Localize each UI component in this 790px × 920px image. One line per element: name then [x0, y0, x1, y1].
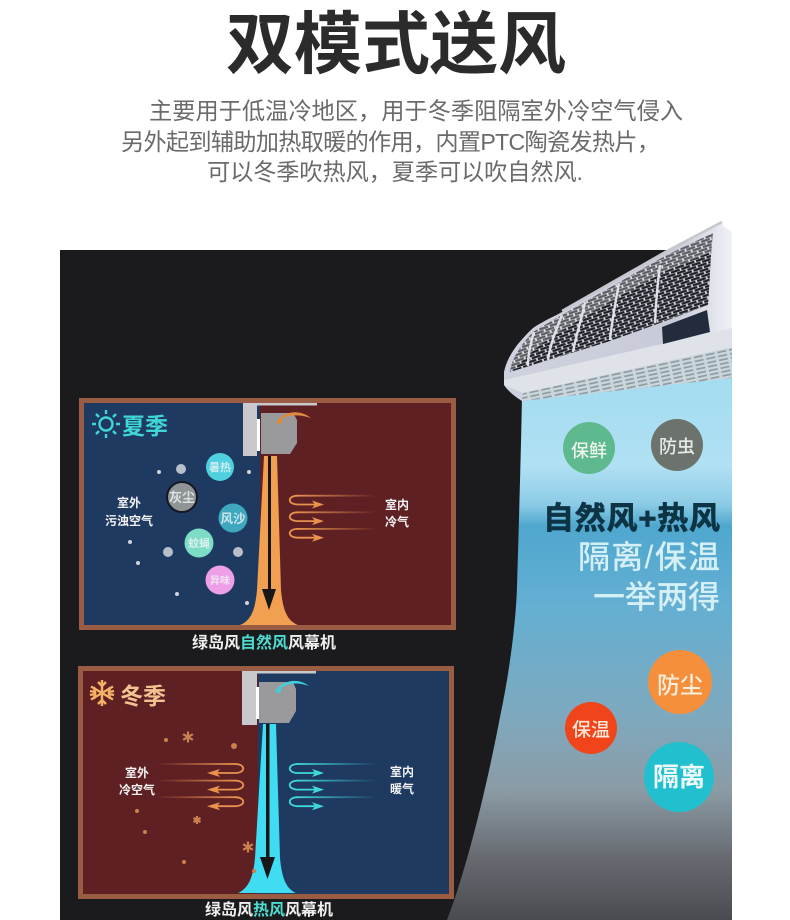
caption: summer: 绿岛风自然风风幕机 [192, 633, 336, 652]
badge: insulation: 保温 [572, 719, 610, 741]
indoor label: 暖气 [390, 781, 414, 796]
intro paragraph: 可以冬季吹热风，夏季可以吹自然风. [207, 159, 583, 185]
intro paragraph [121, 98, 683, 185]
icon: intake swoosh [275, 681, 309, 693]
down arrow [262, 456, 276, 610]
outdoor label: 污浊空气 [105, 513, 153, 528]
badge: dust proof: 防尘 [657, 672, 703, 698]
heading: winter: 冬季 [120, 683, 166, 709]
outdoor label [119, 765, 155, 797]
caption: winter: 绿岛风热风风幕机 [205, 900, 333, 919]
outdoor airflow arrows [156, 763, 243, 810]
intro paragraph: 主要用于低温冷地区，用于冬季阻隔室外冷空气侵入 [149, 98, 683, 124]
light blue feature panel [447, 370, 732, 920]
badge: insect proof: 防虫 [659, 437, 695, 457]
feature headline [543, 501, 720, 615]
snow particles [135, 732, 256, 873]
badge: insect proof [651, 419, 703, 471]
indoor label [385, 497, 409, 529]
indoor airflow arrows [290, 495, 377, 542]
icon: snowflake [90, 680, 114, 706]
control panel [662, 310, 710, 344]
outdoor label: 室外 [117, 495, 141, 510]
title: 双模式送风 [226, 7, 566, 83]
pollutant bubbles: 灰尘 [169, 490, 195, 505]
icon: sun [92, 410, 120, 438]
outdoor label: 室外 [125, 765, 149, 780]
heading: summer: 夏季 [122, 413, 168, 439]
wall and unit [242, 671, 316, 725]
indoor label: 室内 [390, 764, 414, 779]
air curtain stream [240, 456, 298, 625]
indoor label: 室内 [385, 497, 409, 512]
pollutant bubbles: 暑热 [209, 460, 231, 474]
pollutant bubbles: 异味 [210, 575, 230, 587]
wall and unit [243, 403, 317, 456]
indoor label [390, 764, 414, 796]
feature headline: 一举两得 [593, 579, 720, 615]
feature headline: 自然风+热风 [543, 501, 720, 536]
pollutant bubbles: 风沙 [220, 512, 246, 526]
feature headline: 隔离/保温 [578, 539, 720, 575]
badge: insulation [565, 702, 617, 754]
badge: isolation: 隔离 [653, 762, 705, 792]
panel: summer diagram [82, 400, 454, 628]
icon: intake swoosh [276, 412, 311, 424]
intro paragraph: 另外起到辅助加热取暖的作用，内置PTC陶瓷发热片， [121, 129, 660, 155]
outdoor label: 冷空气 [119, 782, 155, 797]
pollutant bubbles [128, 453, 251, 605]
badge: isolation [644, 742, 714, 812]
panel: winter diagram [80, 668, 452, 896]
outdoor label [105, 495, 153, 528]
air curtain unit photo [504, 222, 732, 401]
indoor airflow arrows [290, 763, 377, 810]
badge: keep fresh: 保鲜 [571, 441, 607, 461]
badge: keep fresh [563, 422, 615, 474]
dark background panel [60, 250, 732, 920]
badge: dust proof [648, 650, 712, 714]
down arrow [260, 724, 275, 879]
pollutant bubbles: 蚊蝇 [188, 536, 210, 550]
indoor label: 冷气 [385, 514, 409, 529]
air curtain stream [238, 724, 296, 893]
